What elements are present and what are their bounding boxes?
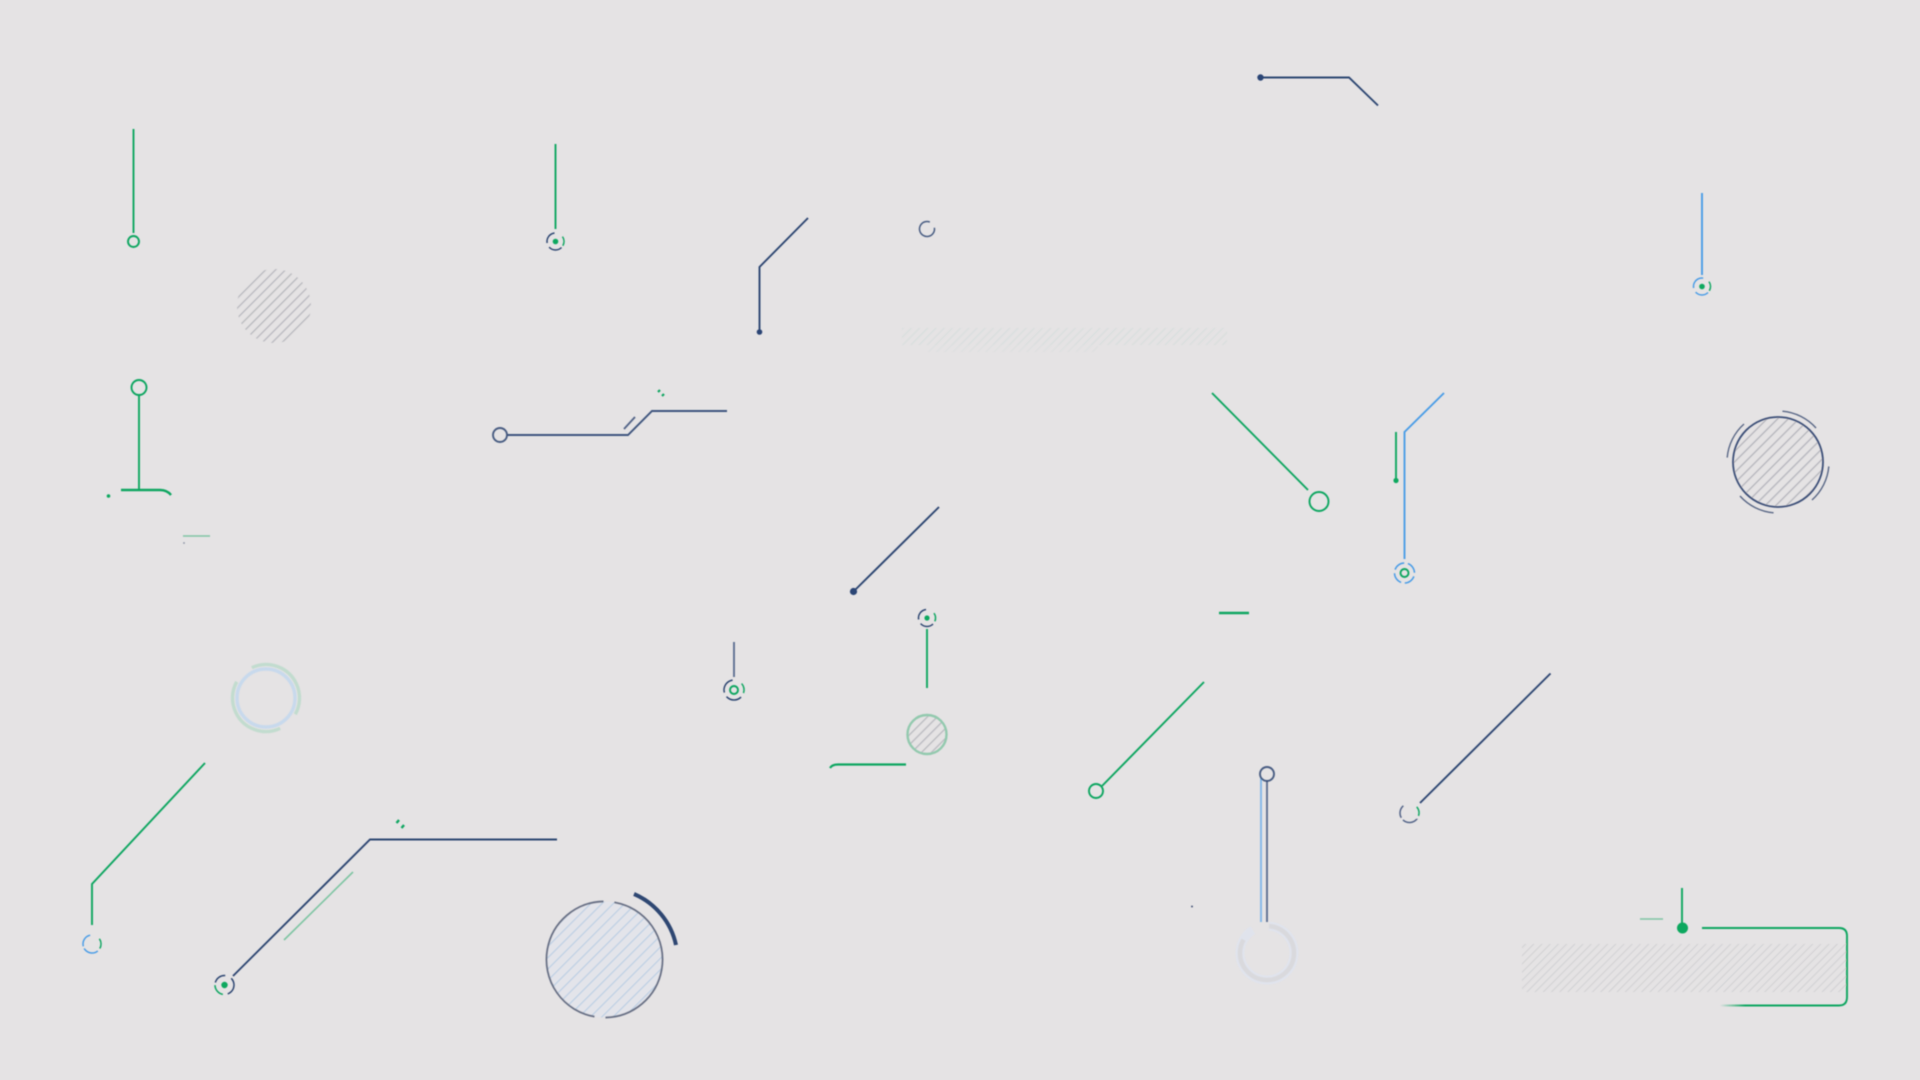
hatched circle: top left bbox=[237, 269, 311, 343]
connector: green elbow with blue ring, bottom left bbox=[79, 763, 205, 957]
open ring: top centre bbox=[918, 220, 936, 238]
tiny dot bbox=[1191, 906, 1193, 908]
hatched strip: top centre bbox=[902, 328, 1227, 352]
hatched circle: right with broken halo bbox=[1723, 407, 1833, 517]
connector: green stem with target, centre bbox=[915, 606, 939, 688]
connector: short green stem with dot bbox=[1393, 432, 1399, 483]
connector: green line with ring, top left bbox=[128, 129, 139, 247]
green curved line: centre bbox=[830, 764, 906, 768]
connector: green stick with foot bbox=[107, 380, 171, 498]
connector: double line with ring and pale circle bbox=[1238, 767, 1296, 982]
connector: navy circuit line, centre left bbox=[493, 390, 727, 442]
connector: green diagonal with ring, lower centre bbox=[1089, 682, 1204, 798]
hatched circle: small green rim bbox=[908, 715, 946, 754]
small dash: left bbox=[183, 536, 210, 544]
connector: navy diagonal with open ring, lower right bbox=[1396, 674, 1550, 826]
connector: navy stem with target, centre bbox=[720, 642, 748, 704]
connector: navy diagonal with dot, centre bbox=[850, 507, 939, 595]
connector: blue elbow with target bbox=[1392, 393, 1444, 586]
connector: green diagonal with ring, centre right bbox=[1212, 393, 1328, 511]
connector: navy elbow, top centre bbox=[757, 218, 808, 335]
pale double ring, lower left bbox=[221, 653, 311, 743]
green dash: centre right bbox=[1219, 612, 1249, 614]
connector: green line with target, top bbox=[543, 144, 568, 254]
connector: navy elbow with target, bottom left bbox=[211, 820, 557, 998]
green bracket with node and hatched strip, bottom right bbox=[1522, 888, 1847, 1006]
connector: blue line with target, top right bbox=[1690, 193, 1714, 299]
large hatched circle with thick arc, bottom left bbox=[537, 892, 676, 1027]
connector: navy elbow with dot, top right bbox=[1257, 74, 1378, 106]
